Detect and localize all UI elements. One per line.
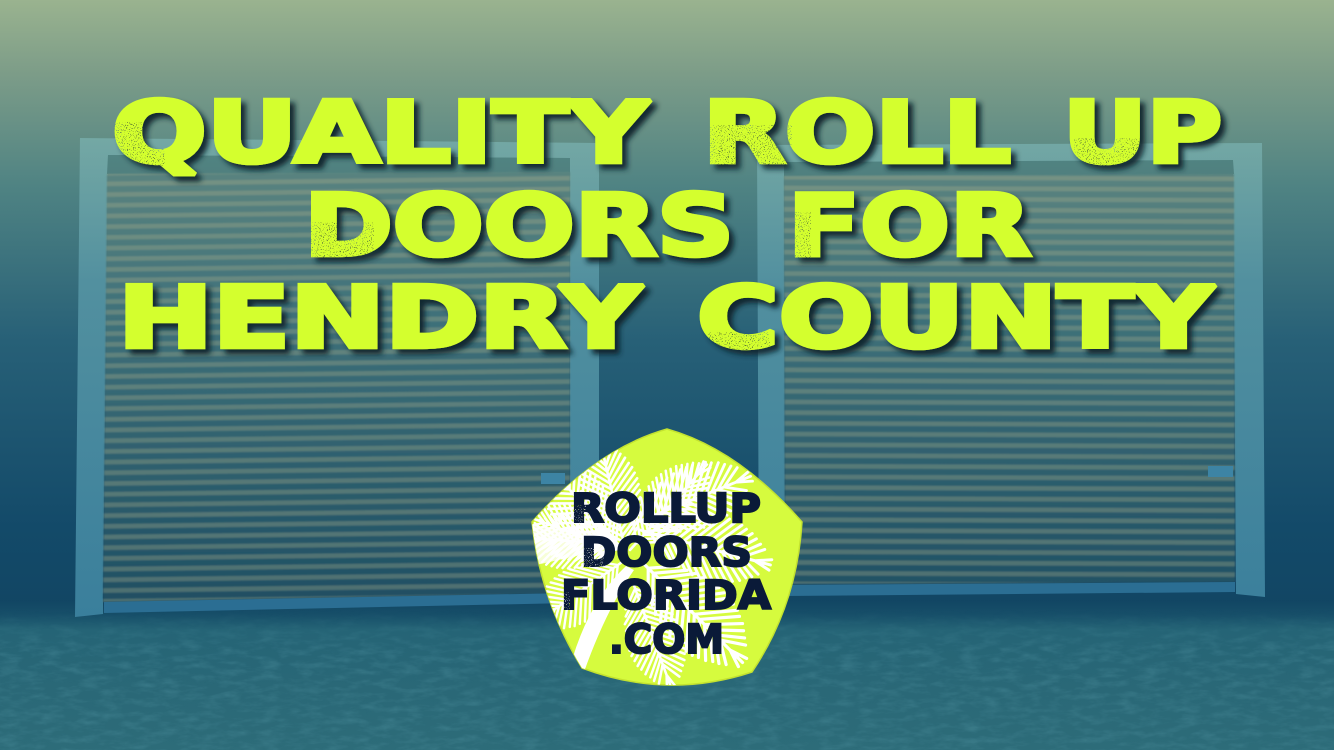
bottom rail (785, 582, 1235, 596)
door frame (75, 138, 599, 617)
icon: palm tree (532, 450, 774, 686)
door slats (784, 174, 1235, 584)
grass ground (0, 600, 1334, 750)
door hood (107, 155, 570, 174)
panel: right roll up door (757, 143, 1265, 597)
door frame (757, 143, 1265, 597)
title line 3: HENDRY (118, 269, 644, 368)
title line 1: UP (1063, 84, 1222, 183)
door latch (1208, 466, 1233, 477)
badge text (561, 484, 772, 663)
door latch (541, 473, 565, 484)
title (112, 84, 1222, 368)
door hood (784, 160, 1234, 176)
door slats (103, 172, 570, 602)
title line 2: FOR (788, 177, 1031, 276)
title line 3: COUNTY (697, 269, 1216, 368)
logo badge (512, 429, 802, 697)
badge shield (532, 429, 802, 685)
badge text: FLORIDA (561, 571, 772, 619)
title line 3 (125, 282, 1225, 359)
title line 2 (311, 190, 1040, 267)
title line 1 (112, 84, 1222, 183)
badge text: DOORS (581, 528, 752, 576)
title line 1: QUALITY (112, 84, 651, 183)
title line 1: ROLL (703, 84, 1011, 183)
bottom rail (104, 593, 570, 613)
title line 2: DOORS (304, 177, 734, 276)
badge text: ROLLUP (571, 484, 761, 532)
badge text: .COM (609, 615, 724, 663)
panel: left roll up door (75, 138, 599, 617)
